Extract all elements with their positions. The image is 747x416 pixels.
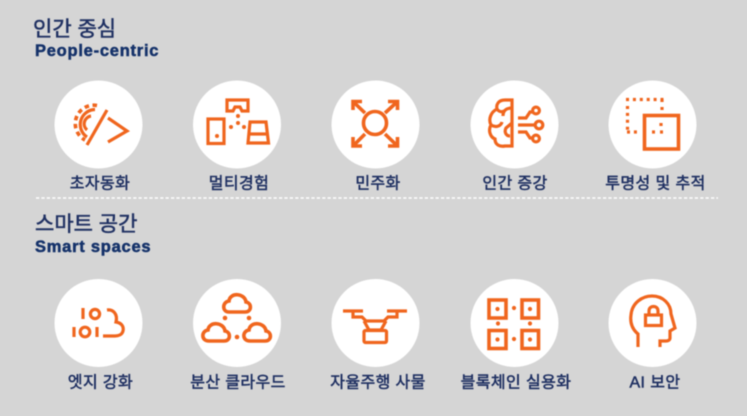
heading: people-centric: People-centric [35,42,159,60]
heading: people-centric [33,18,159,60]
label: 멀티경험 [209,174,269,192]
heading: smart spaces: Smart spaces [35,238,151,256]
label: 블록체인 실용화 [461,374,571,392]
icon: three clouds [203,295,270,341]
label: 분산 클라우드 [190,374,286,392]
heading: smart spaces [35,213,151,256]
label: 민주화 [355,174,401,192]
item: autonomous things [330,279,426,392]
divider [36,197,718,199]
item: practical blockchain [461,279,571,392]
label: 자율주행 사물 [330,374,426,392]
item: transparency and traceability [605,80,706,192]
item: distributed cloud [190,279,286,392]
icon: gear and code [75,105,127,145]
item: democratization [332,80,420,192]
item: AI security [608,279,696,392]
icon: drone [343,311,407,342]
item: hyperautomation [54,80,142,192]
icon: devices [208,100,268,144]
label: 엣지 강화 [68,374,133,392]
icon: binary and cloud [74,308,123,337]
icon: dotted and solid squares [626,99,678,149]
item: human augmentation [470,80,558,192]
heading: smart spaces: 스마트 공간 [35,213,137,236]
label: AI 보안 [629,374,681,392]
item: empowered edge [54,279,142,392]
label: 투명성 및 추적 [605,174,706,192]
label: 초자동화 [70,174,130,192]
label: 인간 증강 [482,174,548,192]
icon: brain with nodes [490,100,543,146]
item: multiexperience [193,80,281,192]
icon: circle with outward arrows [353,102,398,146]
icon: head with padlock [631,296,675,347]
heading: people-centric: 인간 중심 [33,18,116,41]
icon: blockchain squares [489,300,538,348]
